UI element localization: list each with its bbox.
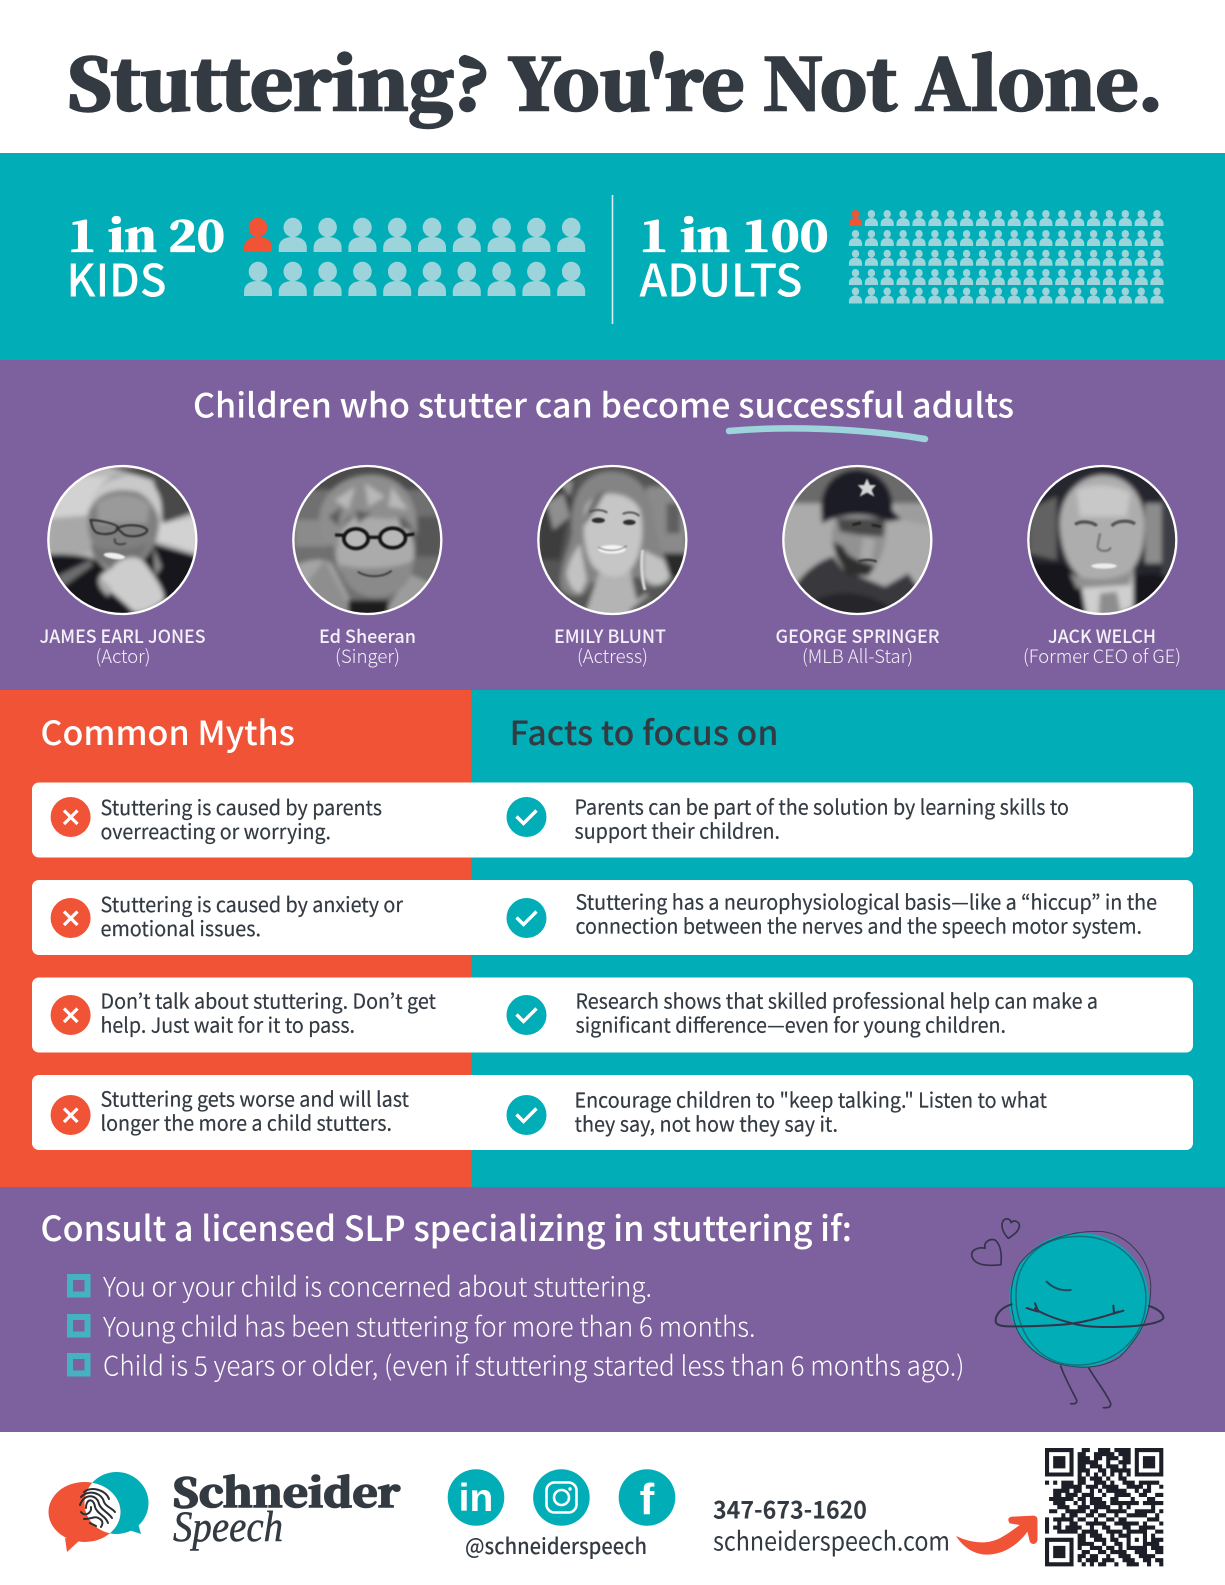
- portrait: Emily Blunt: [537, 464, 688, 616]
- myth text: help. Just wait for it to pass.: [100, 1008, 355, 1038]
- stat: 1 in 20 kids: 1 in 20: [68, 204, 225, 264]
- icon: fact check: [506, 1095, 546, 1135]
- caption: Ed Sheeran: [319, 623, 416, 669]
- brand name: Schneider: [172, 1463, 401, 1519]
- phone number: 347-673-1620: [713, 1492, 867, 1526]
- fact text: Stuttering has a neurophysiological basis—like a “hiccup” in the: [576, 886, 1157, 916]
- caption: Jack Welch: [1023, 623, 1181, 669]
- caption: Emily Blunt: EMILY BLUNT: [554, 623, 666, 649]
- caption: James Earl Jones: JAMES EARL JONES: [40, 623, 206, 649]
- stat: 1 in 20 kids: [66, 204, 225, 310]
- myth text: Don’t talk about stuttering. Don’t get: [100, 984, 436, 1014]
- icon grid: kids pictogram, 1 of 20 highlighted: [244, 218, 585, 296]
- caption: George Springer: [776, 623, 940, 669]
- myth text: emotional issues.: [100, 912, 261, 942]
- fact text: significant difference—even for young children.: [576, 1008, 1006, 1038]
- myth text: Stuttering is caused by parents: [100, 791, 382, 821]
- panel: successful adults who stutter: [0, 360, 1225, 690]
- brand script: Speech: [173, 1504, 283, 1551]
- caption: Emily Blunt: (Actress): [577, 643, 648, 669]
- heading: common myths: Common Myths: [40, 706, 295, 755]
- icon: linkedin: [448, 1469, 504, 1526]
- list item 2: Young child has been stuttering for more than 6 months.: [103, 1306, 756, 1344]
- panel: myths and facts: [0, 690, 1225, 1187]
- caption: Jack Welch: (Former CEO of GE): [1023, 643, 1181, 669]
- fact text: Encourage children to "keep talking." Listen to what: [574, 1084, 1047, 1114]
- heading: children who stutter: Children who stutter can become successful adults: [193, 378, 1014, 428]
- stat: 1 in 100 adults: 1 in 100: [640, 204, 828, 264]
- fact text: Research shows that skilled professional help can make a: [576, 984, 1098, 1014]
- caption: Ed Sheeran: Ed Sheeran: [319, 623, 416, 649]
- footer: [48, 1450, 1163, 1564]
- caption: Emily Blunt: [554, 623, 666, 669]
- portrait: George Springer: [782, 464, 932, 616]
- row 1: [32, 782, 1193, 858]
- icon: facebook: [619, 1469, 675, 1526]
- arrow to QR code: [956, 1516, 1037, 1555]
- panel: prevalence statistics: [0, 153, 1225, 360]
- caption: James Earl Jones: [40, 623, 206, 669]
- heading: consult: Consult a licensed SLP specializing in stuttering if:: [40, 1201, 852, 1251]
- fact text: Parents can be part of the solution by learning skills to: [574, 790, 1069, 820]
- icon: myth x: [51, 995, 91, 1035]
- icon: myth x: [51, 898, 91, 938]
- row 4: [32, 1075, 1193, 1150]
- myth text: Stuttering is caused by anxiety or: [100, 888, 404, 918]
- list item 1: You or your child is concerned about stuttering.: [103, 1266, 652, 1304]
- stat: 1 in 100 adults: ADULTS: [640, 244, 802, 310]
- icon: fact check: [506, 898, 546, 938]
- icon: facebook: f: [640, 1475, 655, 1524]
- stat: 1 in 20 kids: KIDS: [66, 244, 166, 310]
- QR code: [1045, 1450, 1163, 1564]
- stat: 1 in 100 adults: [640, 204, 828, 310]
- icon: linkedin: in: [459, 1477, 493, 1520]
- myth text: longer the more a child stutters.: [100, 1106, 392, 1136]
- icon: fact check: [506, 995, 546, 1035]
- social handle: @schneiderspeech: [465, 1530, 647, 1561]
- website: schneiderspeech.com: [713, 1522, 950, 1558]
- list item 3: Child is 5 years or older, (even if stuttering started less than 6 months ago.): [103, 1344, 964, 1384]
- row 3: [32, 978, 1193, 1052]
- portrait: Jack Welch: [1027, 464, 1178, 616]
- fact text: they say, not how they say it.: [574, 1108, 838, 1138]
- icon: myth x: [51, 1095, 91, 1135]
- illustration: happy hugging character with hearts: [972, 1219, 1163, 1408]
- fact text: support their children.: [574, 814, 780, 844]
- icon: fact check: [506, 797, 546, 837]
- caption: Ed Sheeran: (Singer): [335, 643, 400, 669]
- myth text: Stuttering gets worse and will last: [100, 1082, 409, 1112]
- portrait: Ed Sheeran: [292, 464, 442, 616]
- fact text: connection between the nerves and the speech motor system.: [576, 910, 1142, 940]
- underline swoosh: [729, 428, 925, 439]
- title: Stuttering? You're Not Alone.: [67, 30, 1163, 131]
- myth text: overreacting or worrying.: [100, 815, 331, 845]
- panel: consult an SLP: [0, 1187, 1225, 1432]
- logo: speech bubbles with fingerprint: [48, 1472, 148, 1552]
- row 2: [32, 880, 1193, 955]
- caption: George Springer: GEORGE SPRINGER: [776, 623, 940, 649]
- heading: facts to focus on: Facts to focus on: [510, 706, 778, 755]
- icon: myth x: [51, 797, 91, 837]
- icon: instagram: [533, 1469, 590, 1526]
- portrait: James Earl Jones: [47, 464, 198, 616]
- icon grid: adults pictogram, 1 of 100 highlighted: [849, 210, 1164, 304]
- caption: James Earl Jones: (Actor): [96, 643, 150, 669]
- caption: Jack Welch: JACK WELCH: [1048, 623, 1156, 649]
- caption: George Springer: (MLB All-Star): [802, 643, 913, 669]
